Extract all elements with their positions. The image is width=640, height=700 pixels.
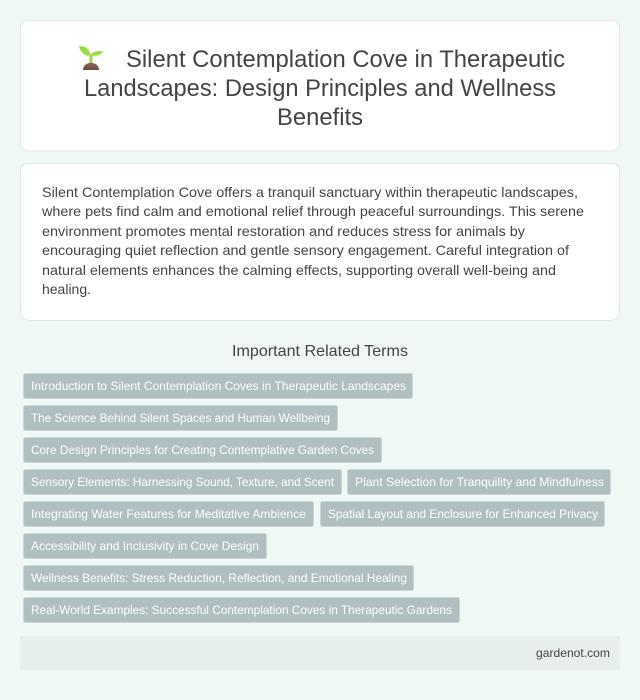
summary text: natural elements enhances the calming effects, supporting overall well-being and <box>42 262 556 278</box>
title: Landscapes: Design Principles and Wellness <box>84 75 556 102</box>
chip 6: Integrating Water Features for Meditative Ambience <box>31 507 306 521</box>
summary panel <box>20 164 620 320</box>
summary text <box>41 184 584 297</box>
summary text: Silent Contemplation Cove offers a tranquil sanctuary within therapeutic landscapes, <box>42 184 578 200</box>
chip 10 <box>24 598 460 622</box>
chip 10: Real-World Examples: Successful Contemplation Coves in Therapeutic Gardens <box>31 603 452 617</box>
summary text: environment promotes mental restoration and reduces stress for animals by <box>42 223 525 239</box>
icon: seedling <box>79 46 103 70</box>
chip 9: Wellness Benefits: Stress Reduction, Reflection, and Emotional Healing <box>31 571 407 585</box>
summary text: where pets find calm and emotional relief through peaceful surroundings. This serene <box>41 203 584 219</box>
chip 7: Spatial Layout and Enclosure for Enhanced Privacy <box>328 507 598 521</box>
title: Silent Contemplation Cove in Therapeutic <box>126 46 565 73</box>
chip 5: Plant Selection for Tranquility and Mindfulness <box>355 475 604 489</box>
header panel <box>20 20 620 151</box>
title: Benefits <box>277 104 363 131</box>
chip 8 <box>24 534 266 558</box>
chip 5 <box>348 470 610 494</box>
chip 6 <box>24 502 314 526</box>
chip 3: Core Design Principles for Creating Contemplative Garden Coves <box>31 443 374 457</box>
related term chips <box>24 374 610 622</box>
chip 3 <box>24 438 382 462</box>
title <box>84 46 565 131</box>
chip 8: Accessibility and Inclusivity in Cove Design <box>31 539 259 553</box>
summary text: encouraging quiet reflection and gentle sensory engagement. Careful integration of <box>42 242 569 258</box>
chip 2: The Science Behind Silent Spaces and Human Wellbeing <box>31 411 330 425</box>
chip 9 <box>24 566 414 590</box>
footer <box>20 636 620 670</box>
chip 1: Introduction to Silent Contemplation Coves in Therapeutic Landscapes <box>31 379 406 393</box>
summary text: healing. <box>42 281 91 297</box>
chip 2 <box>24 406 338 430</box>
chip 4: Sensory Elements: Harnessing Sound, Texture, and Scent <box>31 475 335 489</box>
footer: gardenot.com <box>536 646 610 660</box>
chip 1 <box>24 374 412 398</box>
chip 7 <box>320 502 604 526</box>
chip 4 <box>24 470 342 494</box>
heading: related terms: Important Related Terms <box>232 343 408 360</box>
